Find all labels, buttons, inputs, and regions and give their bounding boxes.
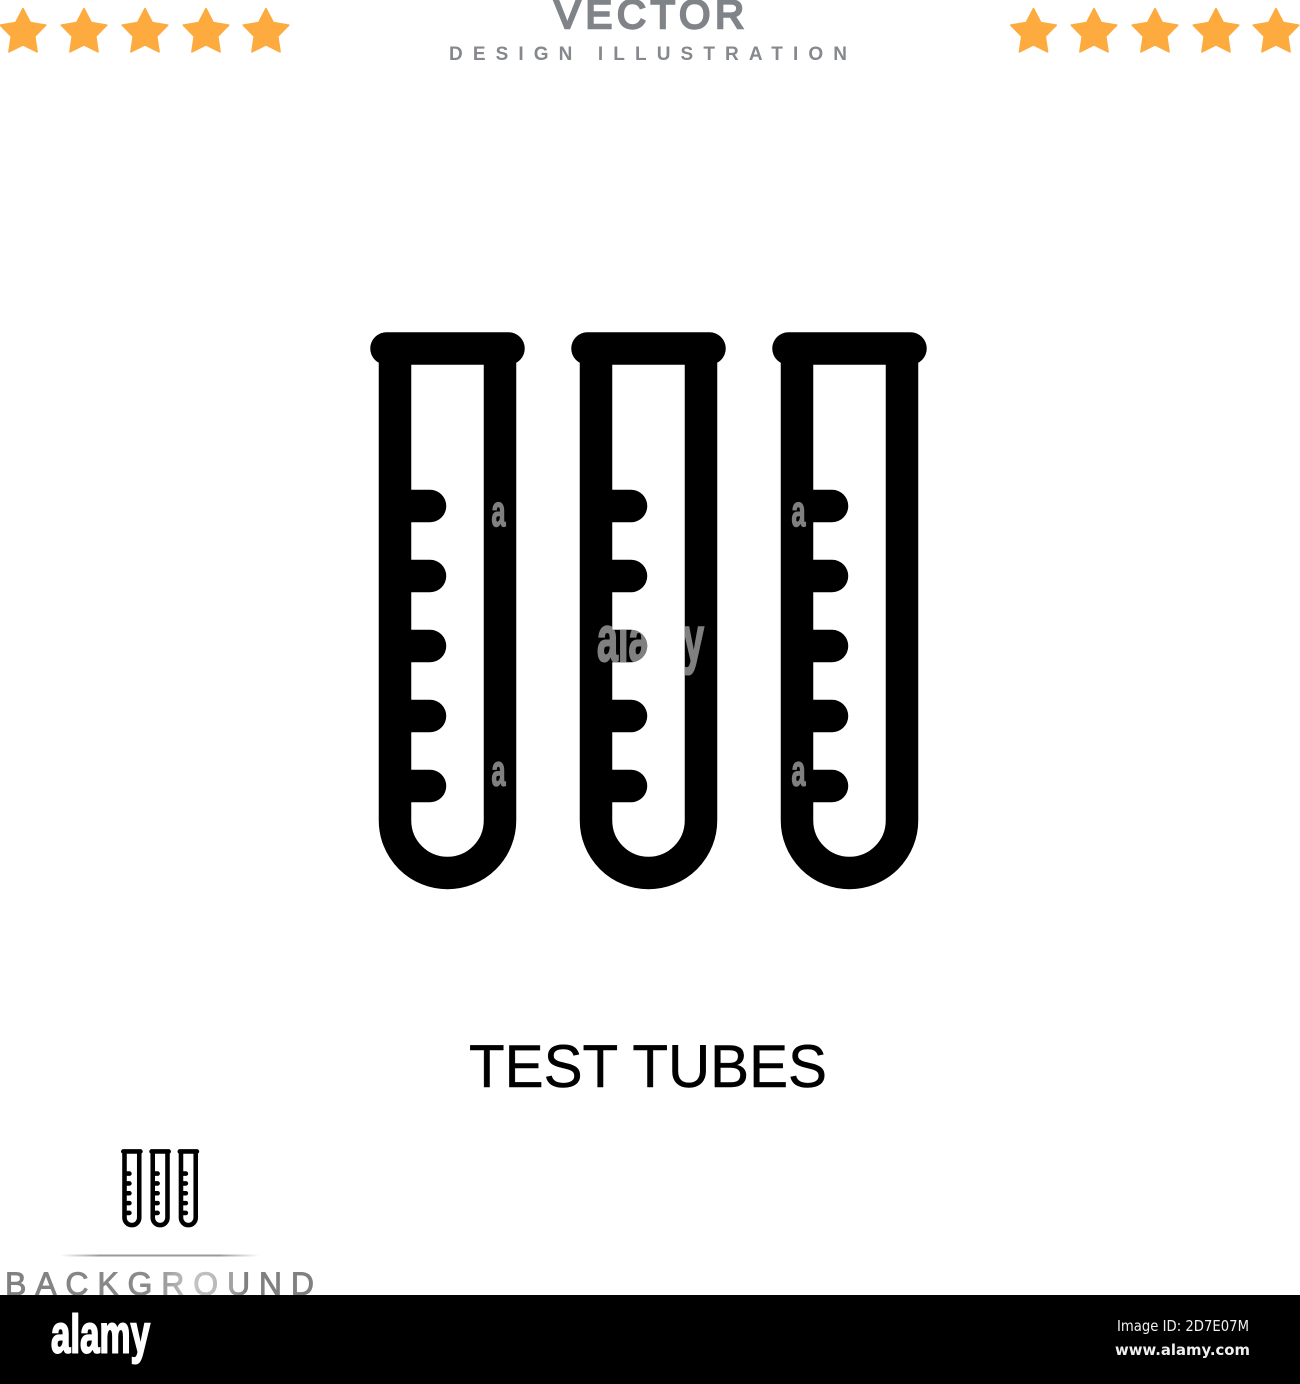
fragment a lower right: a: [792, 746, 806, 795]
website: www.alamy.com: [1115, 1341, 1250, 1359]
watermark fragments: [492, 487, 806, 795]
fragment a upper right: a: [792, 487, 806, 536]
footer bar: [0, 1295, 1300, 1384]
title: TEST TUBES: TEST TUBES: [469, 1033, 827, 1100]
star 1: [1011, 8, 1056, 52]
star 2: [61, 8, 107, 52]
image id: Image ID: 2D7E07M: [1117, 1317, 1249, 1335]
label: BACKGROUND: BACKGROUND: [5, 1266, 314, 1302]
star 5: [1253, 8, 1299, 52]
fragment a upper left: a: [492, 487, 506, 536]
star 4: [183, 8, 229, 52]
main icon: three test tubes: [386, 348, 910, 873]
star rating right: [1011, 8, 1299, 52]
separator line: [60, 1254, 259, 1256]
tube 3: [788, 348, 910, 873]
star 3: [1132, 8, 1178, 52]
tube 1: [386, 348, 508, 873]
small icon: three test tubes: [123, 1151, 197, 1225]
star 5: [243, 8, 289, 52]
star 1: [0, 8, 46, 52]
tube 2: [588, 348, 710, 873]
star rating left: [0, 8, 289, 52]
star 3: [122, 8, 168, 52]
fragment a lower left: a: [492, 746, 506, 795]
alamy logo: alamy: [51, 1304, 150, 1364]
star 4: [1193, 8, 1239, 52]
star 2: [1071, 8, 1117, 52]
watermark: centre alamy: alamy: [597, 603, 704, 675]
subheading: DESIGN ILLUSTRATION: DESIGN ILLUSTRATION: [449, 44, 847, 65]
